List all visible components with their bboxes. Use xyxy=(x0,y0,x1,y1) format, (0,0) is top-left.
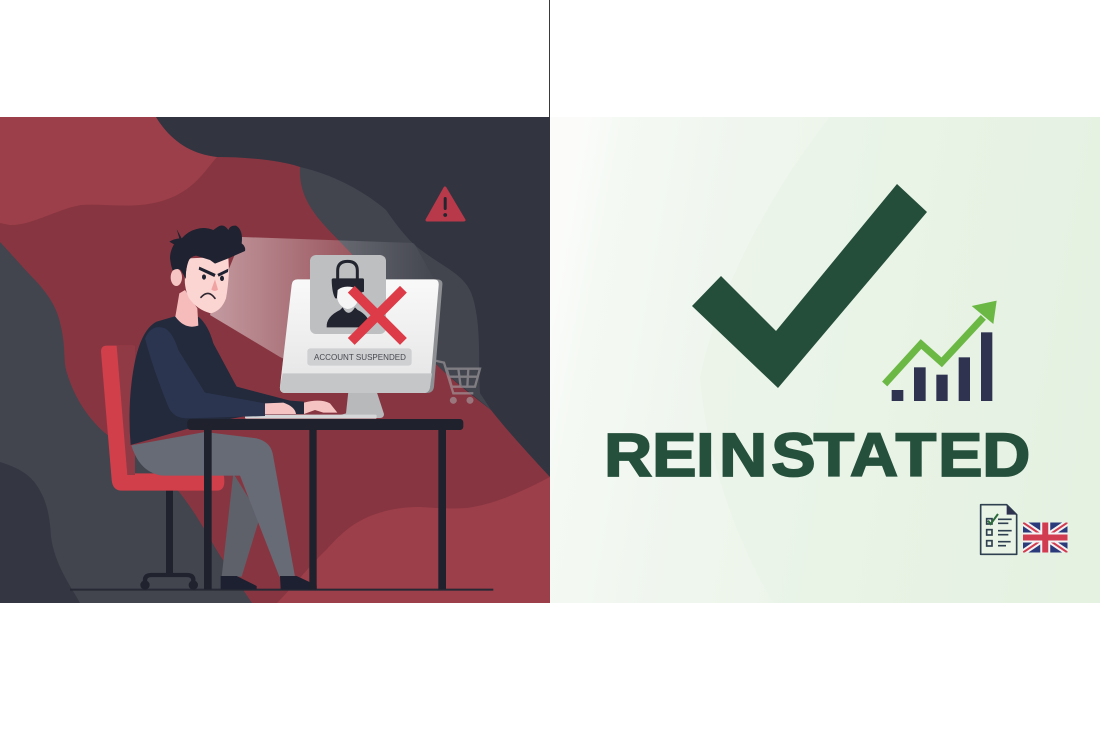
background shape: light red top left xyxy=(0,117,217,225)
large check mark xyxy=(692,184,927,388)
panel: reinstated xyxy=(550,117,1100,603)
floor line xyxy=(70,589,493,591)
man: sweater xyxy=(129,316,304,445)
illustration in zoomed coordinates xyxy=(70,225,493,591)
office chair xyxy=(101,346,224,590)
man: shoes xyxy=(221,576,317,589)
UK flag icon xyxy=(1023,522,1068,552)
man: hands xyxy=(265,401,337,414)
locked profile card xyxy=(310,255,386,334)
checklist document icon xyxy=(981,505,1017,554)
man: angry brows and eyes xyxy=(199,267,228,298)
keyboard xyxy=(245,415,377,419)
background shape: light red bottom right xyxy=(277,477,550,603)
man: hair xyxy=(169,225,245,279)
account suspended label: ACCOUNT SUSPENDED xyxy=(314,352,406,362)
man: arm xyxy=(145,327,265,418)
soft background circle xyxy=(700,117,1100,603)
background shape: navy top right xyxy=(156,117,550,477)
desk xyxy=(187,419,463,589)
account suspended label xyxy=(307,348,412,366)
background shape: translucent gray wave xyxy=(300,167,491,410)
monitor xyxy=(280,255,442,418)
background shape: gray left wave xyxy=(0,242,252,603)
warning triangle icon xyxy=(427,188,464,220)
background shape: dark bottom left xyxy=(0,462,80,603)
growth chart icon xyxy=(885,301,997,401)
panel: suspended account scene xyxy=(0,117,550,603)
man: head xyxy=(169,225,245,327)
light beam from screen xyxy=(210,237,416,358)
red cross icon xyxy=(355,293,400,338)
shopping cart icon xyxy=(435,361,480,403)
man: trousers xyxy=(131,432,295,577)
reinstated heading: REINSTATED xyxy=(604,421,1030,489)
